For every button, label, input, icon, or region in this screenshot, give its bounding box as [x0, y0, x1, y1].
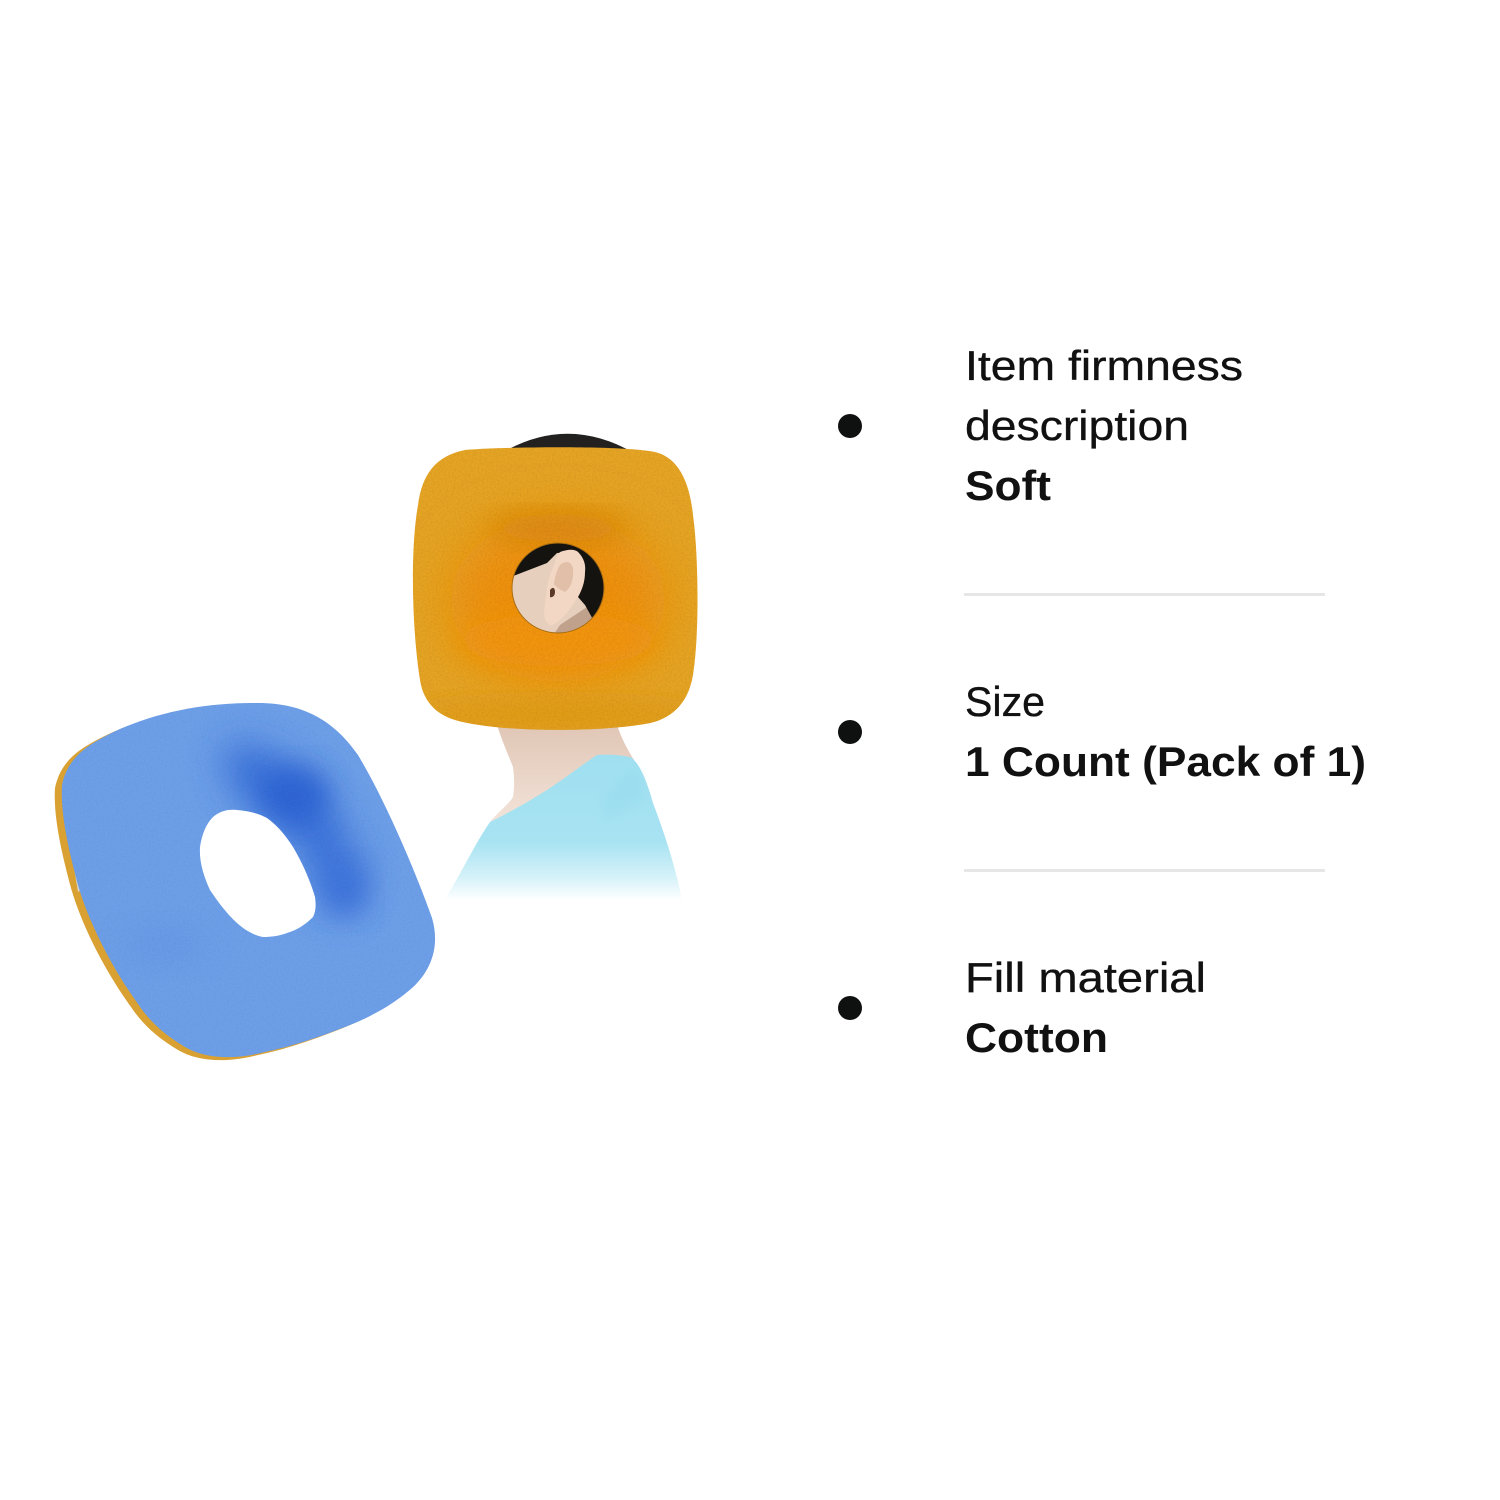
orange pillow: [405, 440, 708, 735]
dark shading near hole: [224, 744, 362, 915]
spec row: item firmness: [838, 342, 1243, 509]
spec row: item firmness: description: [965, 402, 1189, 449]
product photo: person wearing orange pillow: [405, 434, 708, 900]
ear: [544, 550, 585, 625]
label: Item firmness: [965, 342, 1243, 389]
spec row: size: [838, 678, 1366, 785]
neck: [490, 725, 634, 822]
cushion hole: [200, 810, 316, 937]
orange underside edge: [55, 706, 428, 1060]
bullet: [838, 996, 862, 1020]
value: 1 Count (Pack of 1): [965, 738, 1366, 785]
label: Size: [965, 678, 1045, 725]
product photo: blue pillow: [50, 695, 445, 1070]
bullet: [838, 720, 862, 744]
blue cushion: [62, 703, 435, 1057]
neck shadow in opening: [555, 608, 592, 632]
value: Soft: [965, 462, 1051, 509]
value: Cotton: [965, 1014, 1108, 1061]
hair above pillow: [507, 434, 634, 453]
spec row: fill material: [838, 954, 1206, 1061]
ear opening: [512, 544, 604, 632]
zipper pull: [74, 866, 83, 892]
blue shirt: [444, 755, 682, 900]
bullet: [838, 414, 862, 438]
label: Fill material: [965, 954, 1206, 1001]
hair in opening: [514, 544, 604, 618]
